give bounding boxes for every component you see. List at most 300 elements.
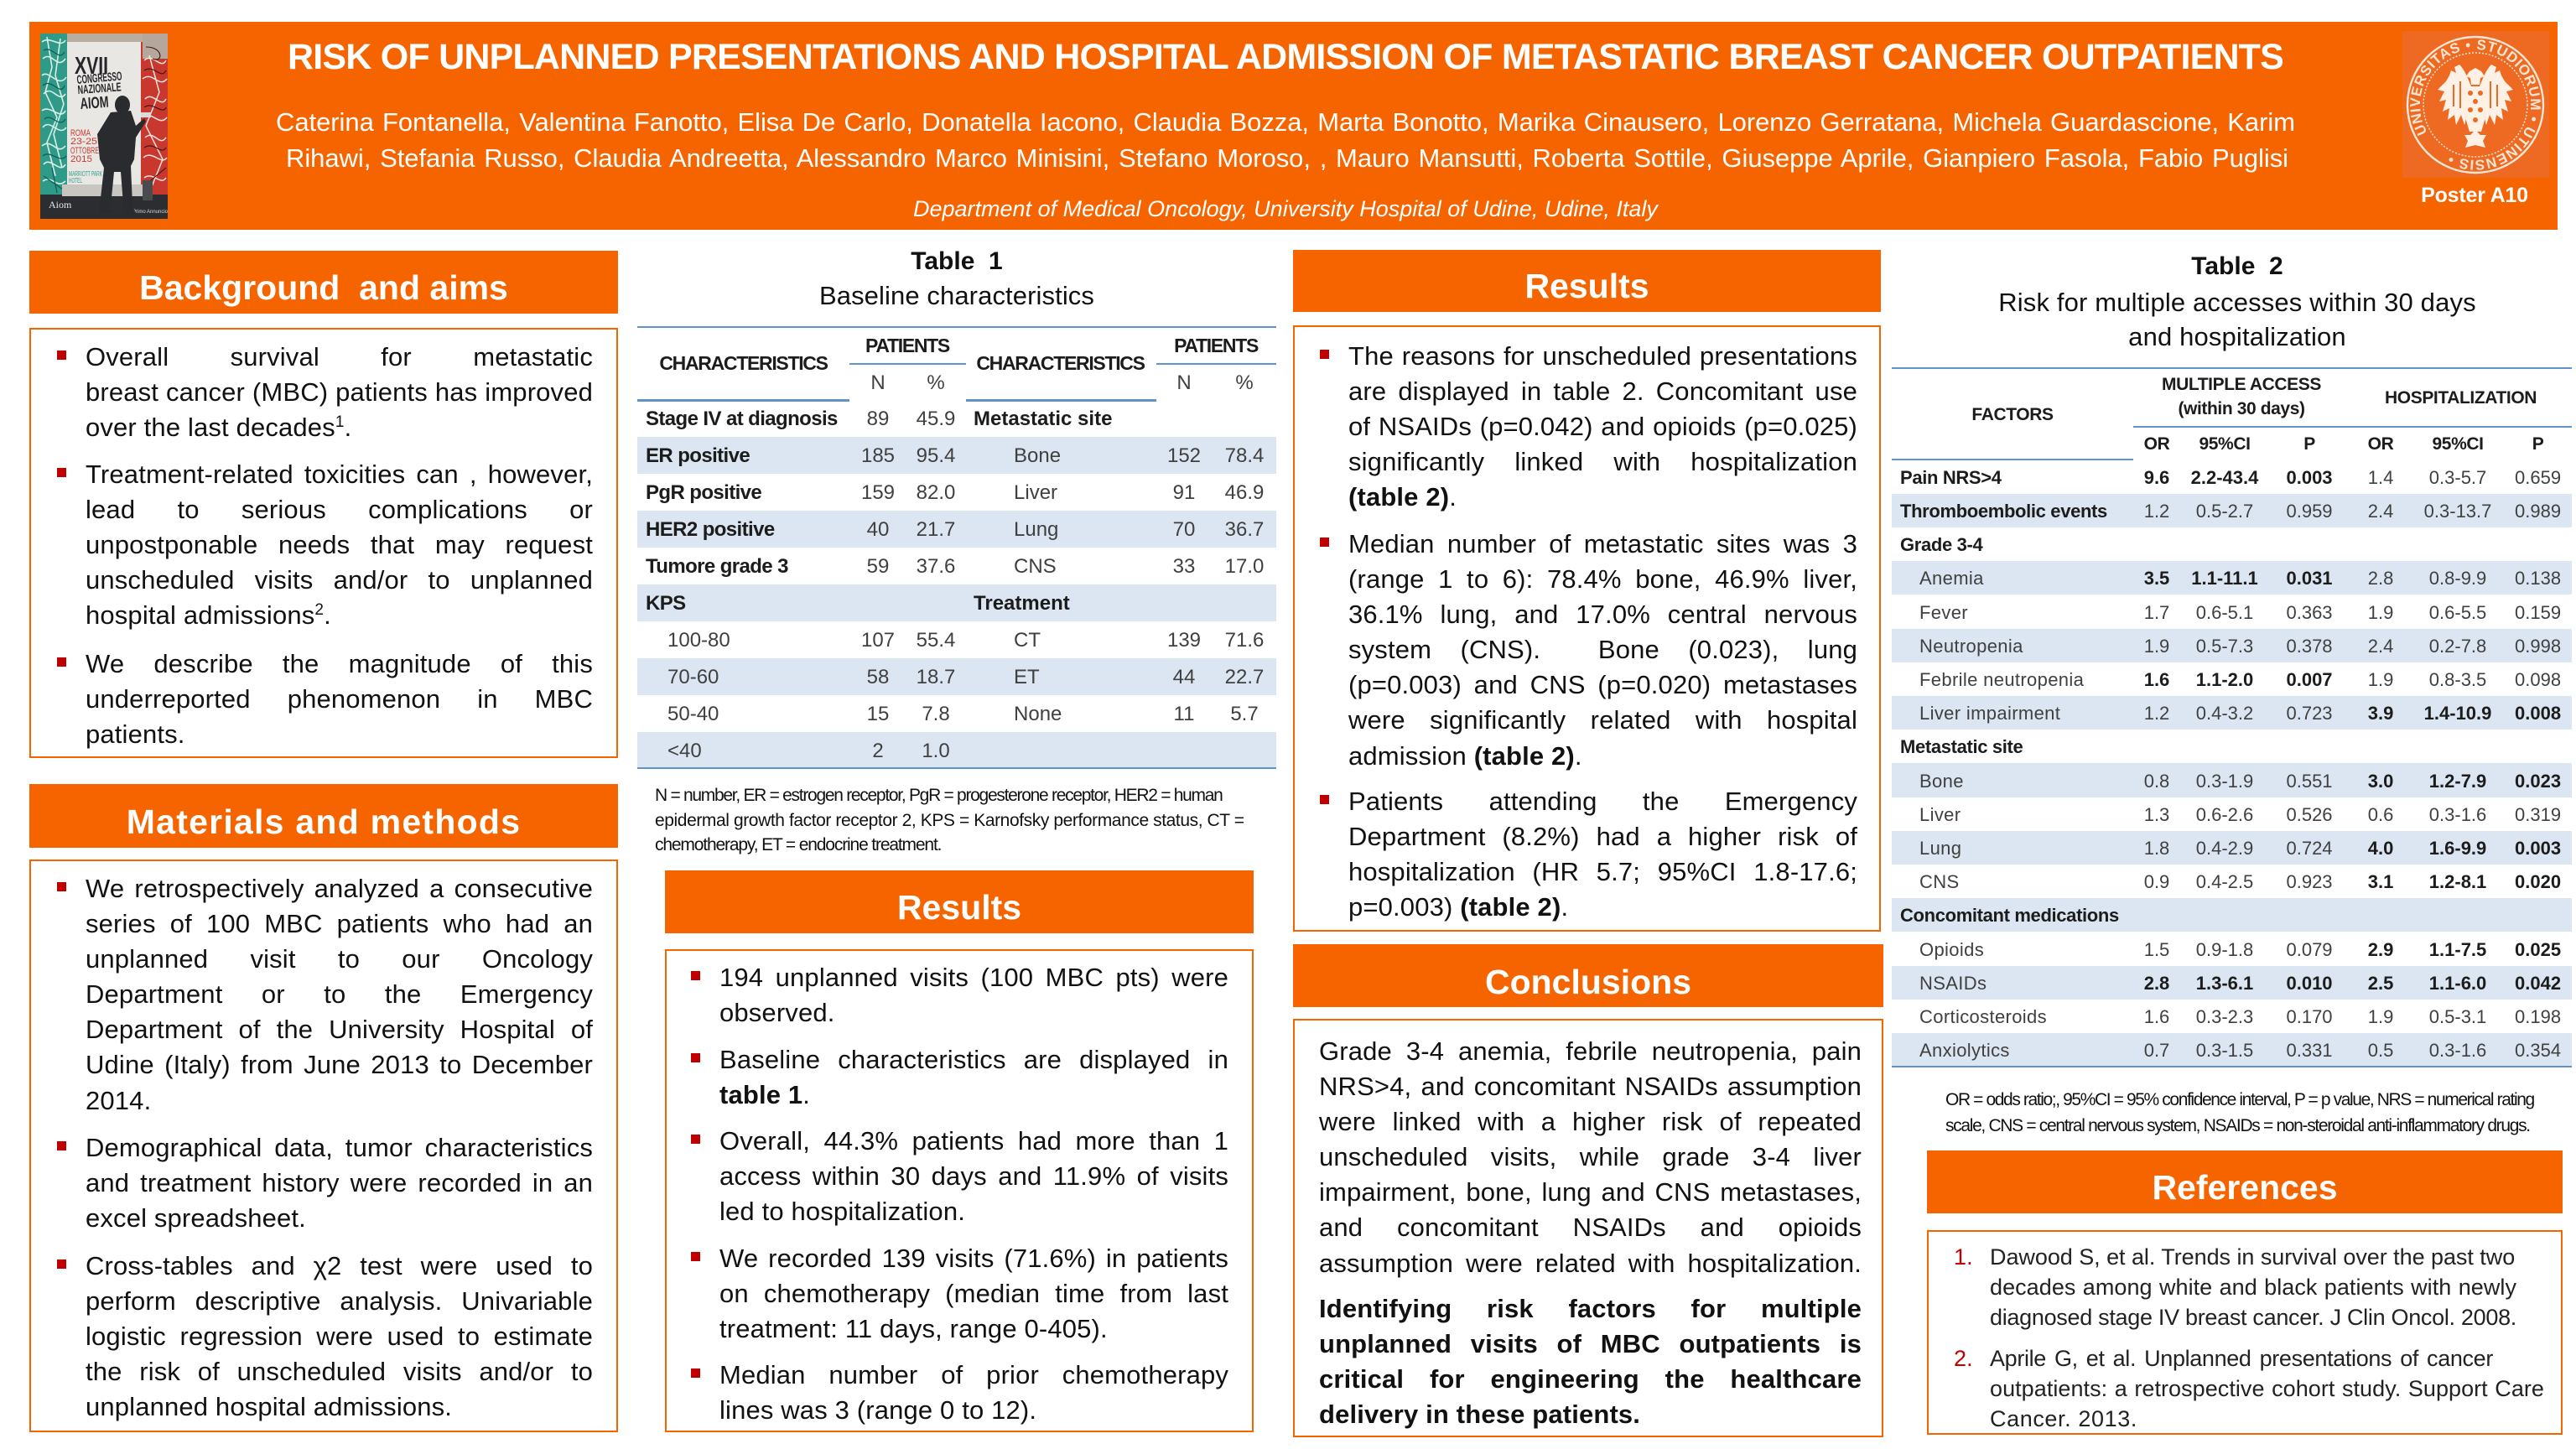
- poster lettering: Primo Annuncio: [132, 210, 168, 215]
- risk factors table: Anxiolytics: [1919, 1040, 2010, 1061]
- baseline characteristics table: Tumore grade 3: [646, 555, 788, 578]
- risk factors table: 0.138: [2515, 568, 2561, 589]
- bullet 1: [57, 874, 593, 1115]
- panel: references: 2.: [1954, 1346, 1973, 1371]
- risk factors table: 0.551: [2286, 770, 2333, 792]
- risk factors table: Lung: [1919, 838, 1961, 859]
- risk factors table: 0.007: [2286, 669, 2333, 690]
- risk factors table: Fever: [1919, 602, 1968, 622]
- baseline characteristics table: ER positive: [646, 444, 750, 467]
- bullet 2: unpostponable needs that may request: [86, 530, 593, 559]
- risk factors table: OR: [2144, 434, 2169, 453]
- risk factors table: 0.098: [2515, 669, 2561, 690]
- reference 2: outpatients: a retrospective cohort study. Support Care: [1990, 1376, 2544, 1401]
- risk factors table: Neutropenia: [1919, 636, 2023, 657]
- bullet 4: We recorded 139 visits (71.6%) in patients: [719, 1244, 1228, 1273]
- baseline characteristics table: 2: [872, 740, 884, 761]
- risk factors table: CNS: [1919, 871, 1959, 892]
- conclusion paragraph: [1319, 1036, 1862, 1278]
- text box: [665, 949, 1254, 1432]
- reference 1: [1954, 1244, 2516, 1330]
- poster lettering: AIOM: [80, 94, 109, 113]
- baseline characteristics table: Treatment: [974, 592, 1070, 615]
- risk factors table: 1.2: [2144, 703, 2169, 724]
- reference 1: diagnosed stage IV breast cancer. J Clin Oncol. 2008.: [1990, 1305, 2516, 1330]
- reference 2: Aprile G, et al. Unplanned presentations of cancer: [1990, 1346, 2493, 1371]
- risk factors table: 0.023: [2515, 770, 2561, 792]
- poster lettering: MARRIOTT PARK: [69, 170, 102, 178]
- risk factors table: 0.5-7.3: [2196, 636, 2253, 657]
- heading: Materials and methods: [127, 802, 521, 841]
- risk factors table: 1.9: [2368, 602, 2393, 622]
- bullet 4: [691, 1244, 1228, 1343]
- table 2 title: Table 2: [2191, 252, 2283, 280]
- risk factors table: 0.7: [2144, 1040, 2169, 1061]
- baseline characteristics table: 50-40: [667, 703, 719, 725]
- bullet 3: hospitalization (HR 5.7; 95%CI 1.8-17.6;: [1348, 857, 1857, 886]
- text box: [1927, 1230, 2563, 1435]
- risk factors table: 1.1-7.5: [2429, 939, 2486, 959]
- baseline characteristics table: PATIENTS: [865, 334, 949, 356]
- bullet 1: of NSAIDs (p=0.042) and opioids (p=0.025): [1348, 412, 1857, 441]
- risk factors table: 0.4-3.2: [2196, 703, 2253, 724]
- risk factors table: 1.2-7.9: [2429, 770, 2486, 792]
- bullet 2: and treatment history were recorded in an: [86, 1168, 593, 1197]
- reference 2: [1990, 1343, 2544, 1434]
- conclusion paragraph: assumption were related with hospitalization.: [1319, 1249, 1862, 1278]
- bullet 2: table 1.: [719, 1080, 810, 1109]
- baseline characteristics table: Lung: [1014, 518, 1058, 541]
- baseline characteristics table: <40: [667, 740, 702, 761]
- authors: Rihawi, Stefania Russo, Claudia Andreetta, Alessandro Marco Minisini, Stefano Moroso, , Mauro Mansutti, Roberta Sottile, Giuseppe Aprile, Gianpiero Fasola, Fabio Puglisi: [286, 143, 2288, 173]
- baseline characteristics table: 185: [861, 444, 895, 467]
- risk factors table: 2.9: [2368, 939, 2393, 959]
- baseline characteristics table: PgR positive: [646, 481, 761, 504]
- bullet 2: Median number of metastatic sites was 3: [1348, 529, 1857, 558]
- risk factors table: HOSPITALIZATION: [2385, 387, 2537, 408]
- text box: [1293, 325, 1881, 932]
- table 1 title: Table 1: [911, 247, 1003, 275]
- conclusion paragraph: and concomitant NSAIDs and opioids: [1319, 1213, 1862, 1242]
- bullet 1: breast cancer (MBC) patients has improved: [86, 377, 593, 407]
- panel: table 1 baseline characteristics: [637, 247, 1276, 854]
- poster lettering: 23-25: [70, 137, 97, 147]
- bullet 3: perform descriptive analysis. Univariable: [86, 1286, 593, 1316]
- heading: Conclusions: [1485, 963, 1691, 1001]
- bullet 1: We retrospectively analyzed a consecutive: [86, 874, 593, 903]
- baseline characteristics table: %: [1235, 371, 1254, 394]
- panel: results detail: [1293, 250, 1881, 932]
- risk factors table: 2.8: [2144, 973, 2169, 994]
- reference 1: decades among white and black patients with newly: [1990, 1275, 2516, 1300]
- university seal: UNIVERSITAS • STUDIORUM • UTINENSIS •: [2410, 40, 2541, 170]
- bullet 2: excel spreadsheet.: [86, 1203, 306, 1233]
- bullet 2: [57, 1133, 593, 1233]
- bullet 1: Udine (Italy) from June 2013 to December: [86, 1050, 593, 1079]
- bullet 1: [1320, 341, 1857, 512]
- risk factors table: 0.3-1.5: [2196, 1040, 2253, 1061]
- risk factors table: FACTORS: [1971, 404, 2054, 424]
- baseline characteristics table: 100-80: [667, 629, 730, 652]
- bullet 3: the risk of unscheduled visits and/or to: [86, 1357, 593, 1386]
- table 1 footnote: chemotherapy, ET = endocrine treatment.: [655, 835, 941, 854]
- risk factors table: 0.3-1.6: [2429, 1040, 2486, 1061]
- risk factors table: 0.5-2.7: [2196, 501, 2253, 522]
- risk factors table: 0.998: [2515, 636, 2561, 657]
- table 2 subtitle: [1998, 288, 2476, 351]
- baseline characteristics table: KPS: [646, 592, 686, 615]
- bullet 1: The reasons for unscheduled presentations: [1348, 341, 1857, 371]
- risk factors table: 0.042: [2515, 973, 2561, 994]
- risk factors table: 0.319: [2515, 804, 2561, 825]
- baseline characteristics table: 18.7: [917, 666, 955, 688]
- bullet 1: Department of the University Hospital of: [86, 1015, 593, 1044]
- poster lettering: CONGRESSO: [76, 70, 122, 87]
- risk factors table: Liver: [1919, 804, 1961, 825]
- bullet 2: were significantly related with hospital: [1348, 705, 1857, 735]
- bullet 4: on chemotherapy (median time from last: [719, 1279, 1228, 1308]
- painter figure: [97, 96, 153, 215]
- table 1 subtitle: Baseline characteristics: [819, 281, 1094, 310]
- poster lettering: ROMA: [70, 128, 91, 138]
- risk factors table: (within 30 days): [2178, 399, 2305, 418]
- baseline characteristics table: 21.7: [917, 518, 955, 541]
- risk factors table: 0.003: [2515, 838, 2561, 859]
- bullet 1: Department or to the Emergency: [86, 979, 593, 1009]
- risk factors table: 4.0: [2368, 838, 2393, 859]
- baseline characteristics table: 46.9: [1225, 481, 1264, 504]
- risk factors table: Thromboembolic events: [1900, 501, 2107, 522]
- bullet 1: unplanned visit to our Oncology: [86, 944, 593, 974]
- risk factors table: 2.5: [2368, 973, 2393, 994]
- baseline characteristics table: 45.9: [917, 408, 955, 430]
- key message: delivery in these patients.: [1319, 1400, 1640, 1429]
- baseline characteristics table: [637, 334, 1276, 767]
- reference 1: Dawood S, et al. Trends in survival over the past two: [1990, 1244, 2515, 1270]
- conclusion paragraph: NRS>4, and concomitant NSAIDs assumption: [1319, 1072, 1862, 1101]
- risk factors table: 3.9: [2368, 703, 2393, 724]
- risk factors table: 1.3: [2144, 804, 2169, 825]
- baseline characteristics table: 40: [867, 518, 889, 541]
- risk factors table: 1.9: [2368, 1006, 2393, 1027]
- bullet 2: system (CNS). Bone (0.023), lung: [1348, 635, 1857, 664]
- risk factors table: 0.6-5.1: [2196, 602, 2253, 622]
- bullet 3: [57, 649, 593, 749]
- risk factors table: 0.5: [2368, 1040, 2393, 1061]
- risk factors table: 95%CI: [2433, 434, 2484, 453]
- baseline characteristics table: 70-60: [667, 666, 719, 688]
- risk factors table: 2.4: [2368, 636, 2393, 657]
- bullet 3: Department (8.2%) had a higher risk of: [1348, 822, 1857, 851]
- risk factors table: Anemia: [1919, 568, 1984, 589]
- risk factors table: 0.959: [2286, 501, 2333, 522]
- poster number: Poster A10: [2421, 184, 2528, 207]
- bullet 3: p=0.003) (table 2).: [1348, 892, 1568, 922]
- baseline characteristics table: 22.7: [1225, 666, 1264, 688]
- baseline characteristics table: Metastatic site: [974, 408, 1112, 430]
- key message: Identifying risk factors for multiple: [1319, 1294, 1862, 1323]
- key message: unplanned visits of MBC outpatients is: [1319, 1329, 1862, 1358]
- baseline characteristics table: 7.8: [922, 703, 950, 725]
- risk factors table: 0.8-9.9: [2429, 568, 2486, 589]
- baseline characteristics table: 15: [867, 703, 889, 725]
- baseline characteristics table: PATIENTS: [1174, 334, 1258, 356]
- risk factors table: 1.9: [2144, 636, 2169, 657]
- risk factors table: 0.724: [2286, 838, 2333, 859]
- risk factors table: 0.923: [2286, 871, 2333, 892]
- conclusion paragraph: unscheduled visits, while grade 3-4 liver: [1319, 1142, 1862, 1171]
- key message: critical for engineering the healthcare: [1319, 1364, 1862, 1394]
- risk factors table: 1.3-6.1: [2196, 973, 2253, 994]
- bullet 2: [1320, 529, 1857, 771]
- risk factors table: 0.010: [2286, 973, 2333, 994]
- header banner: [29, 22, 2558, 230]
- poster lettering: [49, 53, 169, 215]
- title: RISK OF UNPLANNED PRESENTATIONS AND HOSPITAL ADMISSION OF METASTATIC BREAST CANCER OUTPATIENTS: [288, 37, 2283, 77]
- bullet 3: patients.: [86, 719, 185, 749]
- risk factors table: 1.8: [2144, 838, 2169, 859]
- bullet 2: Demographical data, tumor characteristics: [86, 1133, 593, 1162]
- risk factors table: 0.159: [2515, 602, 2561, 622]
- poster lettering: HOTEL: [69, 177, 82, 184]
- risk factors table: 1.9: [2368, 669, 2393, 690]
- heading: [1293, 250, 1881, 312]
- panel: conclusions: [1293, 944, 1883, 1437]
- risk factors table: 0.8: [2144, 770, 2169, 792]
- table 2 subtitle: Risk for multiple accesses within 30 days: [1998, 288, 2476, 317]
- risk factors table: 0.4-2.5: [2196, 871, 2253, 892]
- bullet 3: [691, 1126, 1228, 1226]
- risk factors table: 0.378: [2286, 636, 2333, 657]
- panel: table 2 risk factors: [1892, 252, 2572, 1135]
- bullet 1: Overall survival for metastatic: [86, 342, 593, 371]
- poster lettering: OTTOBRE: [70, 146, 99, 156]
- table 2 subtitle: and hospitalization: [2128, 322, 2346, 351]
- risk factors table: 3.5: [2144, 568, 2169, 589]
- risk factors table: Concomitant medications: [1900, 905, 2119, 926]
- baseline characteristics table: 89: [867, 408, 889, 430]
- risk factors table: 2.4: [2368, 501, 2393, 522]
- risk factors table: 2.2-43.4: [2191, 467, 2258, 488]
- bullet 1: are displayed in table 2. Concomitant use: [1348, 377, 1857, 406]
- text box: [29, 328, 618, 758]
- risk factors table: MULTIPLE ACCESS: [2162, 375, 2321, 394]
- risk factors table: OR: [2368, 434, 2393, 453]
- risk factors table: 1.6-9.9: [2429, 838, 2486, 859]
- risk factors table: 1.6: [2144, 669, 2169, 690]
- risk factors table: Febrile neutropenia: [1919, 669, 2084, 690]
- baseline characteristics table: 5.7: [1230, 703, 1259, 725]
- risk factors table: 0.354: [2515, 1040, 2561, 1061]
- baseline characteristics table: 91: [1173, 481, 1195, 504]
- baseline characteristics table: 1.0: [922, 740, 950, 761]
- bullet 5: Median number of prior chemotherapy: [719, 1360, 1228, 1389]
- baseline characteristics table: CHARACTERISTICS: [976, 352, 1145, 374]
- risk factors table: 0.003: [2286, 467, 2333, 488]
- bullet 2: hospital admissions2.: [86, 600, 331, 630]
- risk factors table: 0.6-5.5: [2429, 602, 2486, 622]
- risk factors table: 0.6-2.6: [2196, 804, 2253, 825]
- risk factors table: 1.6: [2144, 1006, 2169, 1027]
- baseline characteristics table: 152: [1167, 444, 1201, 467]
- risk factors table: Corticosteroids: [1919, 1006, 2047, 1027]
- bullet 3: access within 30 days and 11.9% of visits: [719, 1161, 1228, 1191]
- risk factors table: 0.008: [2515, 703, 2561, 724]
- risk factors table: 1.2: [2144, 501, 2169, 522]
- bullet 2: [57, 460, 593, 630]
- risk factors table: Opioids: [1919, 939, 1984, 959]
- panel: results summary: [665, 870, 1254, 1432]
- baseline characteristics table: CHARACTERISTICS: [659, 352, 828, 374]
- panel: materials and methods: [29, 784, 618, 1432]
- bullet 3: led to hospitalization.: [719, 1197, 965, 1226]
- baseline characteristics table: 95.4: [917, 444, 955, 467]
- risk factors table: Grade 3-4: [1900, 534, 1982, 555]
- baseline characteristics table: ET: [1014, 666, 1040, 688]
- risk factors table: 0.3-5.7: [2429, 467, 2486, 488]
- bullet 2: Treatment-related toxicities can , however,: [86, 460, 593, 489]
- bullet 5: [691, 1360, 1228, 1425]
- bullet 1: significantly linked with hospitalization: [1348, 447, 1857, 476]
- baseline characteristics table: CT: [1014, 629, 1041, 652]
- heading: [1293, 944, 1883, 1007]
- risk factors table: 1.1-6.0: [2429, 973, 2486, 994]
- risk factors table: 3.0: [2368, 770, 2393, 792]
- risk factors table: Metastatic site: [1900, 736, 2023, 757]
- risk factors table: 0.3-13.7: [2424, 501, 2491, 522]
- baseline characteristics table: N: [870, 371, 886, 394]
- risk factors table: [1892, 375, 2572, 1066]
- risk factors table: 3.1: [2368, 871, 2393, 892]
- risk factors table: Bone: [1919, 770, 1964, 792]
- risk factors table: 0.3-2.3: [2196, 1006, 2253, 1027]
- bullet 3: logistic regression were used to estimate: [86, 1322, 593, 1351]
- heading: [29, 784, 618, 848]
- risk factors table: 0.9-1.8: [2196, 939, 2253, 959]
- conclusion paragraph: impairment, bone, lung and CNS metastases,: [1319, 1177, 1862, 1207]
- bullet 1: 194 unplanned visits (100 MBC pts) were: [719, 963, 1228, 992]
- text box: [1293, 1019, 1883, 1437]
- risk factors table: 0.3-1.6: [2429, 804, 2486, 825]
- bullet 3: [1320, 787, 1857, 922]
- bullet 1: over the last decades1.: [86, 413, 351, 442]
- bullet 2: (range 1 to 6): 78.4% bone, 46.9% liver,: [1348, 564, 1857, 594]
- baseline characteristics table: 107: [861, 629, 895, 652]
- bullet 1: series of 100 MBC patients who had an: [86, 909, 593, 938]
- risk factors table: 0.170: [2286, 1006, 2333, 1027]
- authors: Caterina Fontanella, Valentina Fanotto, Elisa De Carlo, Donatella Iacono, Claudia Bozza, Marta Bonotto, Marika Cinausero, Lorenzo Gerratana, Michela Guardascione, Karim: [276, 107, 2295, 137]
- risk factors table: 0.6: [2368, 804, 2393, 825]
- heading: [1927, 1150, 2563, 1213]
- risk factors table: 0.8-3.5: [2429, 669, 2486, 690]
- bullet 3: underreported phenomenon in MBC: [86, 684, 593, 714]
- risk factors table: Pain NRS>4: [1900, 467, 2002, 488]
- heading: Background and aims: [139, 268, 508, 307]
- bullet 3: unplanned hospital admissions.: [86, 1392, 452, 1421]
- eagle: [2438, 65, 2513, 148]
- bullet 3: Cross-tables and χ2 test were used to: [86, 1251, 593, 1280]
- baseline characteristics table: 44: [1173, 666, 1195, 688]
- table 2 footnote: OR = odds ratio;, 95%CI = 95% confidence interval, P = p value, NRS = numerical rating: [1945, 1090, 2534, 1109]
- risk factors table: 0.5-3.1: [2429, 1006, 2486, 1027]
- poster lettering: XVII: [75, 53, 108, 80]
- baseline characteristics table: N: [1176, 371, 1192, 394]
- baseline characteristics table: 71.6: [1225, 629, 1264, 652]
- risk factors table: 1.2-8.1: [2429, 871, 2486, 892]
- heading: References: [2152, 1168, 2338, 1207]
- risk factors table: 1.1-2.0: [2196, 669, 2253, 690]
- bullet 1: observed.: [719, 998, 835, 1027]
- reference 2: Cancer. 2013.: [1990, 1406, 2137, 1431]
- baseline characteristics table: CNS: [1014, 555, 1057, 578]
- authors: [276, 107, 2295, 173]
- risk factors table: 95%CI: [2199, 434, 2251, 453]
- heading: [665, 870, 1254, 933]
- bullet 1: 2014.: [86, 1086, 151, 1115]
- poster lettering: Aiom: [49, 199, 72, 210]
- bullet 3: [57, 1251, 593, 1421]
- bullet 2: Baseline characteristics are displayed in: [719, 1045, 1228, 1074]
- heading: Results: [1524, 267, 1649, 305]
- poster lettering: 2015: [70, 154, 92, 164]
- bullet 2: unscheduled visits and/or to unplanned: [86, 565, 593, 595]
- table 1 footnote: epidermal growth factor receptor 2, KPS = Karnofsky performance status, CT =: [655, 810, 1244, 830]
- risk factors table: 0.031: [2286, 568, 2333, 589]
- baseline characteristics table: 17.0: [1225, 555, 1264, 578]
- conclusion paragraph: were linked with a higher risk of repeated: [1319, 1107, 1862, 1136]
- risk factors table: 1.5: [2144, 939, 2169, 959]
- risk factors table: NSAIDs: [1919, 973, 1987, 994]
- bullet 2: lead to serious complications or: [86, 495, 593, 524]
- baseline characteristics table: 55.4: [917, 629, 955, 652]
- table 2 footnote: [1945, 1090, 2534, 1135]
- risk factors table: 1.4: [2368, 467, 2393, 488]
- risk factors table: 9.6: [2144, 467, 2169, 488]
- baseline characteristics table: %: [927, 371, 945, 394]
- baseline characteristics table: 37.6: [917, 555, 955, 578]
- risk factors table: 0.2-7.8: [2429, 636, 2486, 657]
- panel: references: [1927, 1150, 2563, 1435]
- risk factors table: 0.079: [2286, 939, 2333, 959]
- poster lettering: NAZIONALE: [77, 80, 122, 97]
- risk factors table: 0.526: [2286, 804, 2333, 825]
- baseline characteristics table: 159: [861, 481, 895, 504]
- bullet 4: treatment: 11 days, range 0-405).: [719, 1314, 1108, 1343]
- baseline characteristics table: 11: [1174, 703, 1194, 725]
- risk factors table: 0.659: [2515, 467, 2561, 488]
- risk factors table: 0.331: [2286, 1040, 2333, 1061]
- risk factors table: 0.198: [2515, 1006, 2561, 1027]
- risk factors table: 0.3-1.9: [2196, 770, 2253, 792]
- risk factors table: Liver impairment: [1919, 703, 2060, 724]
- risk factors table: 0.020: [2515, 871, 2561, 892]
- baseline characteristics table: 70: [1173, 518, 1195, 541]
- risk factors table: 1.7: [2144, 602, 2169, 622]
- risk factors table: 0.9: [2144, 871, 2169, 892]
- baseline characteristics table: 139: [1167, 629, 1201, 652]
- table 1 footnote: [655, 786, 1244, 854]
- risk factors table: 0.723: [2286, 703, 2333, 724]
- heading: [29, 251, 618, 314]
- risk factors table: 0.363: [2286, 602, 2333, 622]
- bullet 3: Patients attending the Emergency: [1348, 787, 1857, 816]
- bullet 1: (table 2).: [1348, 482, 1457, 512]
- risk factors table: P: [2532, 434, 2543, 453]
- baseline characteristics table: 33: [1173, 555, 1195, 578]
- baseline characteristics table: Stage IV at diagnosis: [646, 408, 838, 430]
- risk factors table: 0.4-2.9: [2196, 838, 2253, 859]
- baseline characteristics table: 78.4: [1225, 444, 1264, 467]
